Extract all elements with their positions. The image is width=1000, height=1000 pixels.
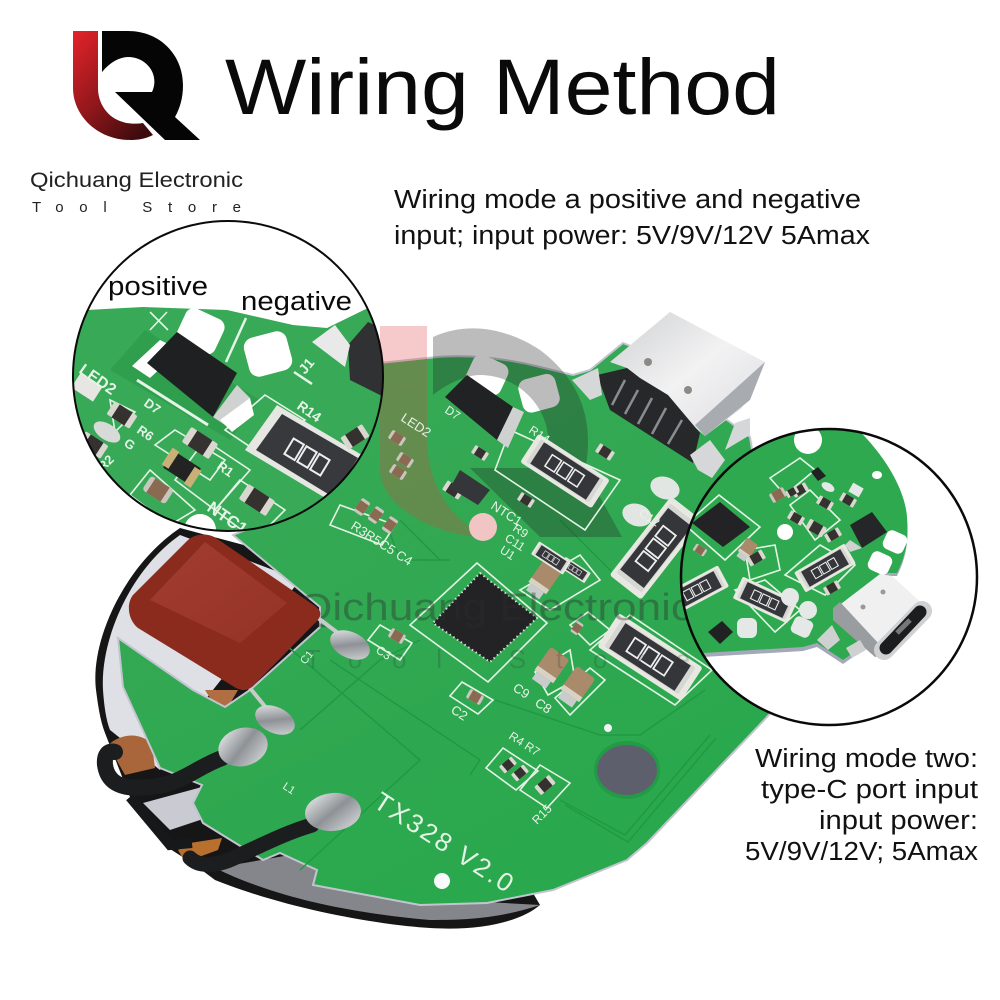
magnified resistor (245, 405, 361, 497)
magnified board (74, 307, 381, 530)
board labels: R4 R7 (506, 729, 543, 759)
solder joints and wires (105, 624, 375, 864)
second board diode (850, 512, 887, 548)
second board pads (777, 426, 909, 577)
board labels: R9 (510, 521, 531, 541)
board labels (280, 403, 663, 898)
second board (670, 420, 908, 660)
magnified labels: NTC1 (204, 498, 251, 539)
board labels: R15 (529, 801, 555, 827)
magnified labels: D7 (141, 395, 164, 417)
board labels: C12 (636, 506, 663, 530)
second board chip (692, 502, 750, 547)
logo (73, 31, 200, 140)
resistors on board (520, 434, 703, 701)
negative label: negative (241, 288, 352, 316)
wiring mode two text: 5V/9V/12V; 5Amax (745, 838, 978, 866)
board labels: C1 (298, 648, 316, 667)
board labels: C9 (510, 680, 532, 702)
magnifier: positive negative input (72, 220, 384, 532)
watermark text: Tool Store (305, 644, 690, 674)
board labels: C11 (502, 531, 528, 554)
magnifier: type-c input (665, 420, 977, 725)
second board resistors (794, 543, 856, 593)
wiring mode two text: Wiring mode two: (755, 745, 978, 773)
board labels: C8 (532, 695, 554, 717)
pads and holes (434, 473, 683, 889)
board labels: NTC1 (488, 498, 525, 529)
magnified parts (74, 374, 102, 402)
wiring mode one text: input; input power: 5V/9V/12V 5Amax (394, 222, 870, 250)
copper coil (108, 736, 155, 775)
board silkscreen boxes (330, 430, 712, 808)
board labels: C3 (373, 643, 394, 663)
second board edge (704, 522, 908, 664)
board labels: LED2 (398, 410, 434, 440)
white pads (176, 308, 225, 354)
store name: Qichuang Electronic (30, 169, 243, 192)
board labels: R3R5C5 C4 (348, 518, 415, 569)
watermark text (298, 587, 693, 674)
store name (30, 169, 243, 216)
watermark text: Qichuang Electronic (298, 587, 693, 629)
red capacitor (129, 534, 350, 715)
diode on board (445, 375, 524, 448)
main circuit board (118, 343, 790, 905)
coil base disk (95, 528, 540, 929)
board labels: C2 (448, 702, 470, 724)
board labels: D7 (442, 403, 463, 423)
board labels: TX328 V2.0 (369, 786, 519, 898)
small components (353, 429, 615, 795)
magnified labels: R1 (214, 458, 237, 480)
board labels: R14 (526, 423, 553, 447)
wiring mode two text: input power: (819, 807, 978, 835)
magnified labels: R2 (95, 452, 117, 474)
board labels: L1 (280, 780, 297, 797)
store name: Tool Store (32, 199, 241, 216)
positive label: positive (108, 273, 208, 301)
board white pads (463, 352, 562, 415)
watermark logo (380, 326, 622, 537)
magnified silkscreen (110, 312, 312, 540)
second type-c connector (817, 574, 927, 658)
title: Wiring Method (225, 42, 780, 131)
magnified labels: J1 (295, 355, 317, 377)
wiring mode two text: type-C port input (761, 776, 978, 804)
magnified labels: R6 (134, 422, 157, 444)
main chip (433, 573, 537, 662)
board traces (280, 520, 716, 870)
wiring mode one text (394, 186, 870, 250)
board labels: U1 (497, 543, 518, 563)
magnified labels: R14 (294, 397, 325, 425)
magnified connector (348, 322, 382, 396)
magnified labels (76, 355, 325, 539)
second board silkscreen (685, 458, 855, 632)
magnified labels: G (121, 435, 138, 453)
magnified labels: LED2 (76, 361, 119, 399)
wiring mode two text (745, 745, 978, 866)
magnified diode (147, 332, 237, 417)
wiring mode one text: Wiring mode a positive and negative (394, 186, 861, 214)
type-c connector on board (572, 312, 765, 478)
